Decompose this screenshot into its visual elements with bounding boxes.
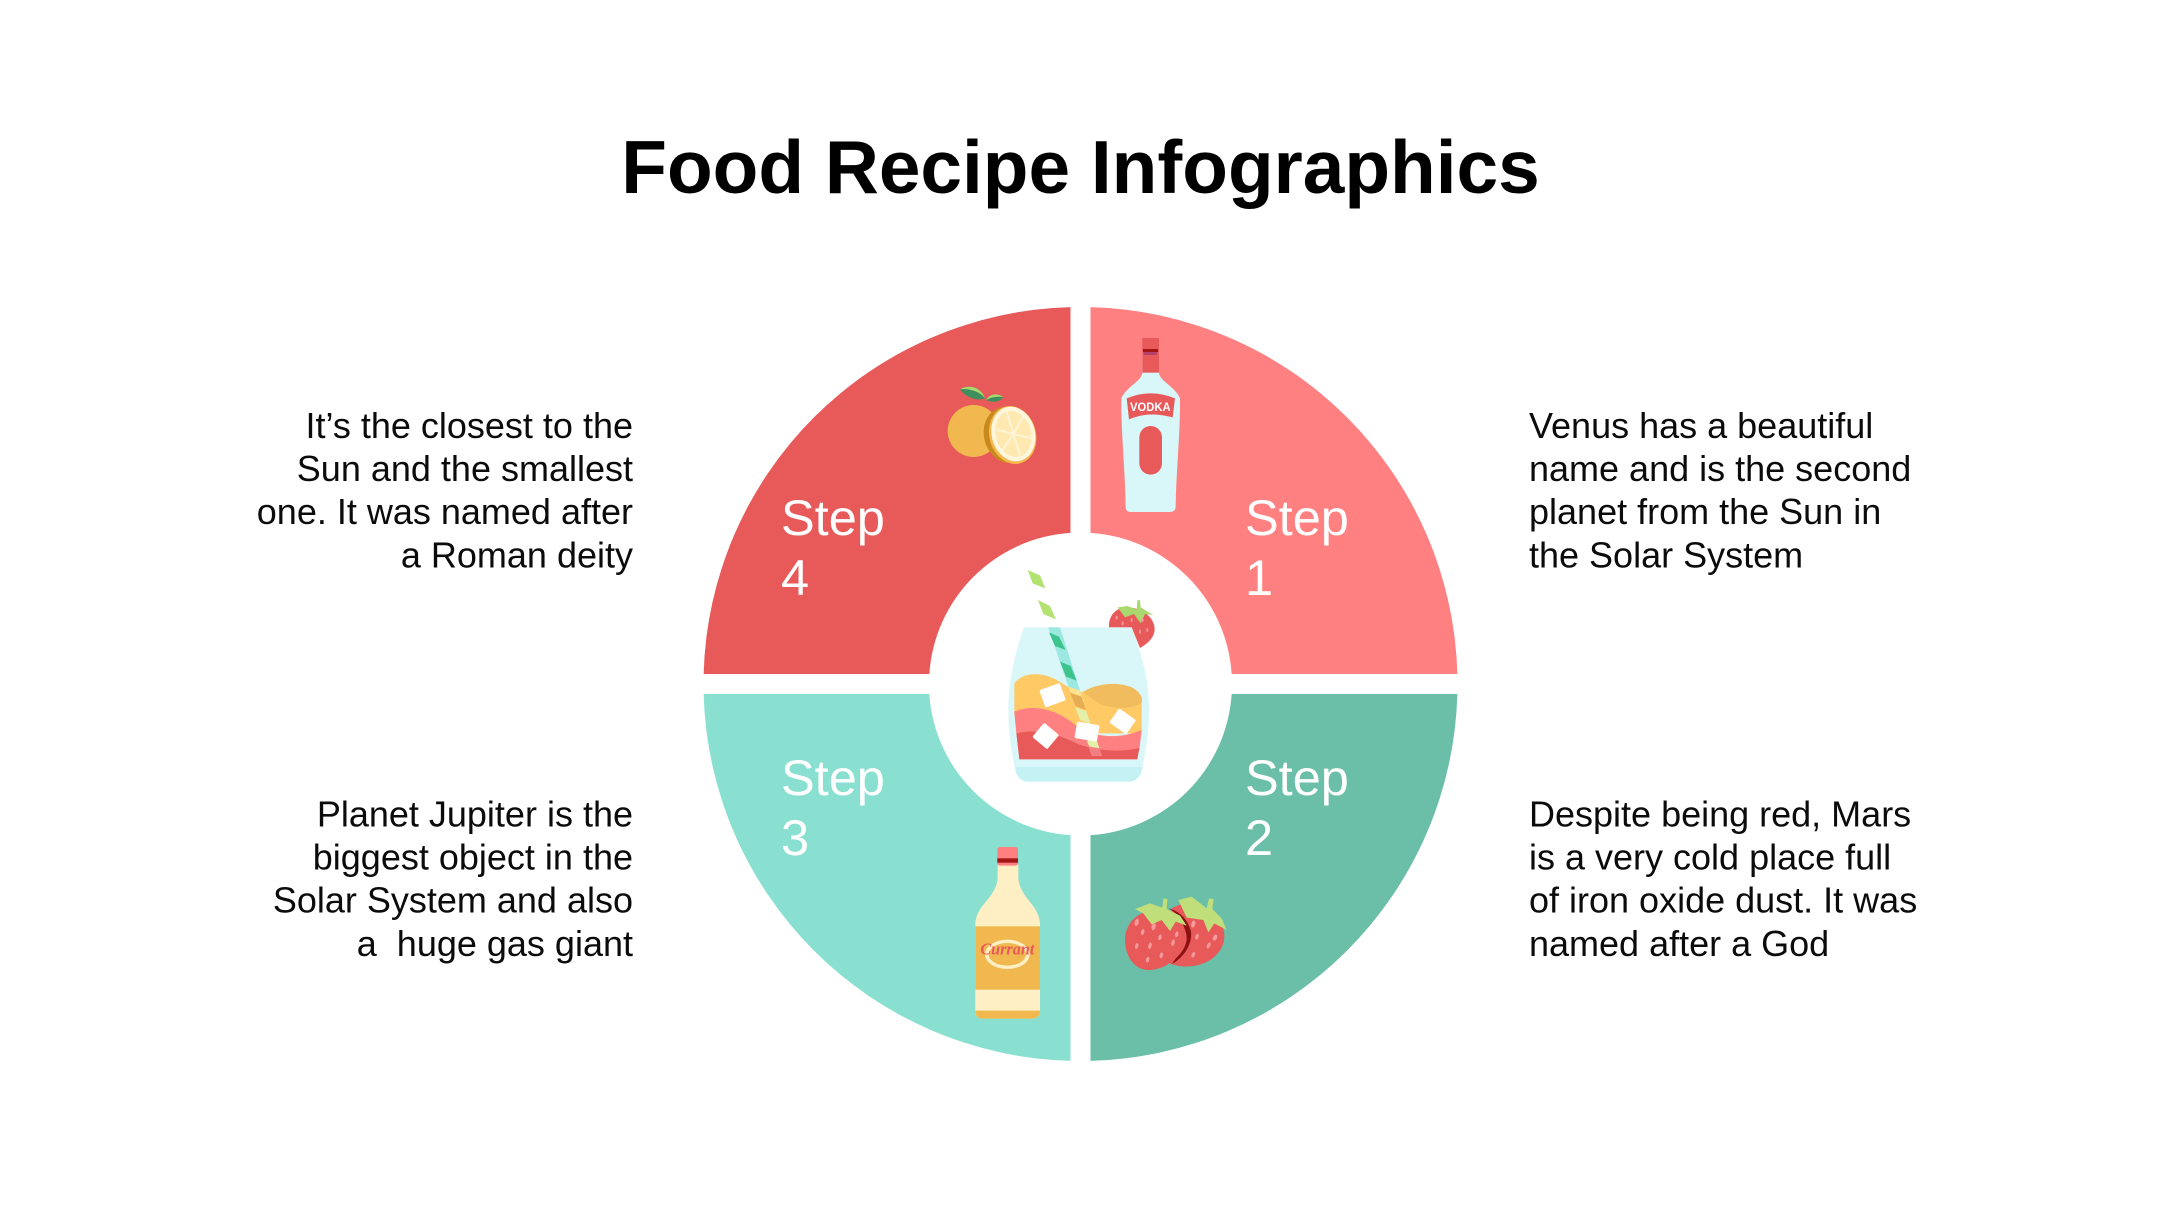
panel: step 2 segment xyxy=(1090,694,1457,1061)
panel: step 1 segment xyxy=(1090,307,1457,674)
panel: step 2 segment: Step xyxy=(1245,749,1349,806)
panel: step 1 segment: Step xyxy=(1245,489,1349,546)
panel: step 2 segment: 2 xyxy=(1245,809,1273,866)
text block: step 3: Planet Jupiter is the xyxy=(317,794,633,834)
icon: vodka bottle: VODKA xyxy=(1130,400,1171,414)
panel: step 4 segment xyxy=(704,307,1070,674)
text block: step 2: is a very cold place full xyxy=(1529,836,1891,878)
panel: step 4 segment: Step xyxy=(781,489,885,546)
text block: step 1: the Solar System xyxy=(1529,534,1803,576)
text block: step 4 xyxy=(257,405,633,576)
panel: step 4 segment: 4 xyxy=(781,549,809,606)
icon: vodka bottle xyxy=(1121,338,1180,512)
text block: step 4: one. It was named after xyxy=(257,491,633,532)
icon: strawberries xyxy=(1125,897,1227,970)
text block: step 3: biggest object in the xyxy=(313,836,633,878)
text block: step 3: a huge gas giant xyxy=(357,923,633,964)
title: Food Recipe Infographics xyxy=(621,125,1540,209)
panel: step 1 segment: 1 xyxy=(1245,549,1273,606)
text block: step 2: named after a God xyxy=(1529,923,1829,964)
text block: step 4: It’s the closest to the xyxy=(305,405,633,446)
text block: step 4: Sun and the smallest xyxy=(297,448,633,489)
text block: step 2: Despite being red, Mars xyxy=(1529,794,1911,834)
text block: step 1: name and is the second xyxy=(1529,448,1911,489)
icon: orange and slice xyxy=(948,387,1043,469)
text block: step 3 xyxy=(273,794,633,964)
icon: cocktail glass xyxy=(1008,570,1155,782)
text block: step 1: planet from the Sun in xyxy=(1529,491,1881,532)
panel: step 3 segment: 3 xyxy=(781,809,809,866)
icon: currant bottle xyxy=(975,847,1040,1019)
panel: step 3 segment: Step xyxy=(781,749,885,806)
text block: step 1: Venus has a beautiful xyxy=(1529,405,1873,446)
icon: currant bottle: Currant xyxy=(980,939,1035,958)
text block: step 1 xyxy=(1529,405,1911,576)
panel: step 3 segment xyxy=(704,694,1070,1061)
text block: step 3: Solar System and also xyxy=(273,880,633,920)
text block: step 2 xyxy=(1529,794,1917,964)
text block: step 2: of iron oxide dust. It was xyxy=(1529,880,1917,920)
text block: step 4: a Roman deity xyxy=(401,534,633,576)
